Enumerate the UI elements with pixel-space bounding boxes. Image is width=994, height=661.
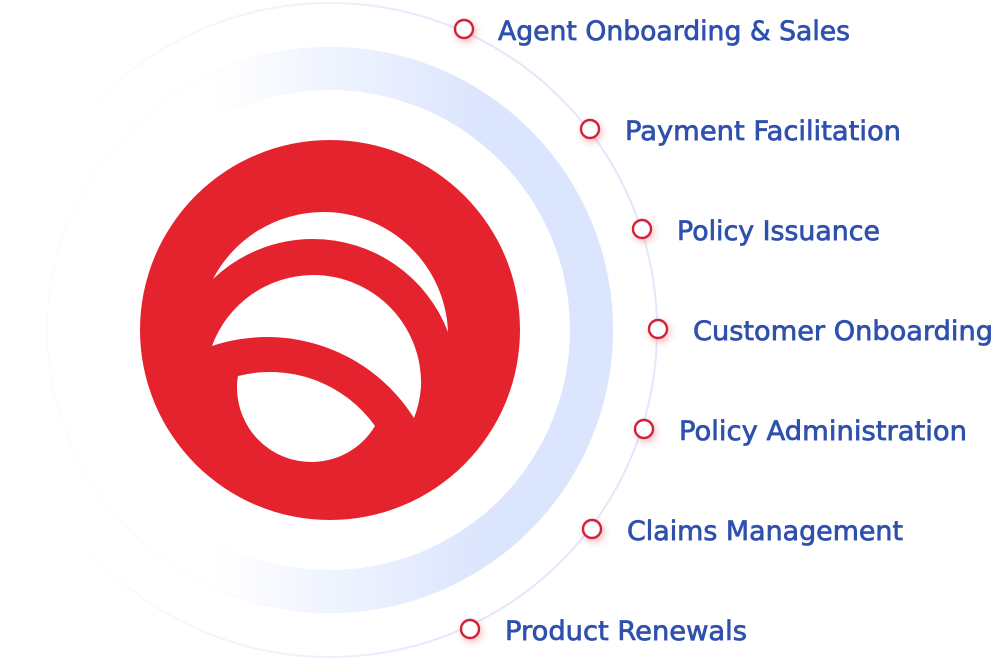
logo: red disc: [140, 140, 520, 520]
logo: [140, 140, 520, 520]
faint band outline: [47, 47, 613, 613]
logo: middle shape: [212, 275, 421, 418]
item: Policy Issuance: Policy Issuance: [677, 216, 880, 247]
outer thin ring: [3, 3, 657, 657]
item: Product Renewals: Product Renewals: [505, 616, 747, 647]
item: Agent Onboarding & Sales: Agent Onboarding & Sales: [498, 16, 850, 47]
item: Payment Facilitation: Payment Facilitation: [625, 116, 901, 147]
blue gradient band: [47, 47, 613, 613]
logo: top crescent: [213, 212, 448, 332]
item: Policy Administration: Policy Administration: [679, 416, 967, 447]
logo: bottom shape: [237, 372, 375, 462]
item: Claims Management: Claims Management: [627, 516, 903, 547]
item: Customer Onboarding: Customer Onboarding: [693, 316, 993, 347]
